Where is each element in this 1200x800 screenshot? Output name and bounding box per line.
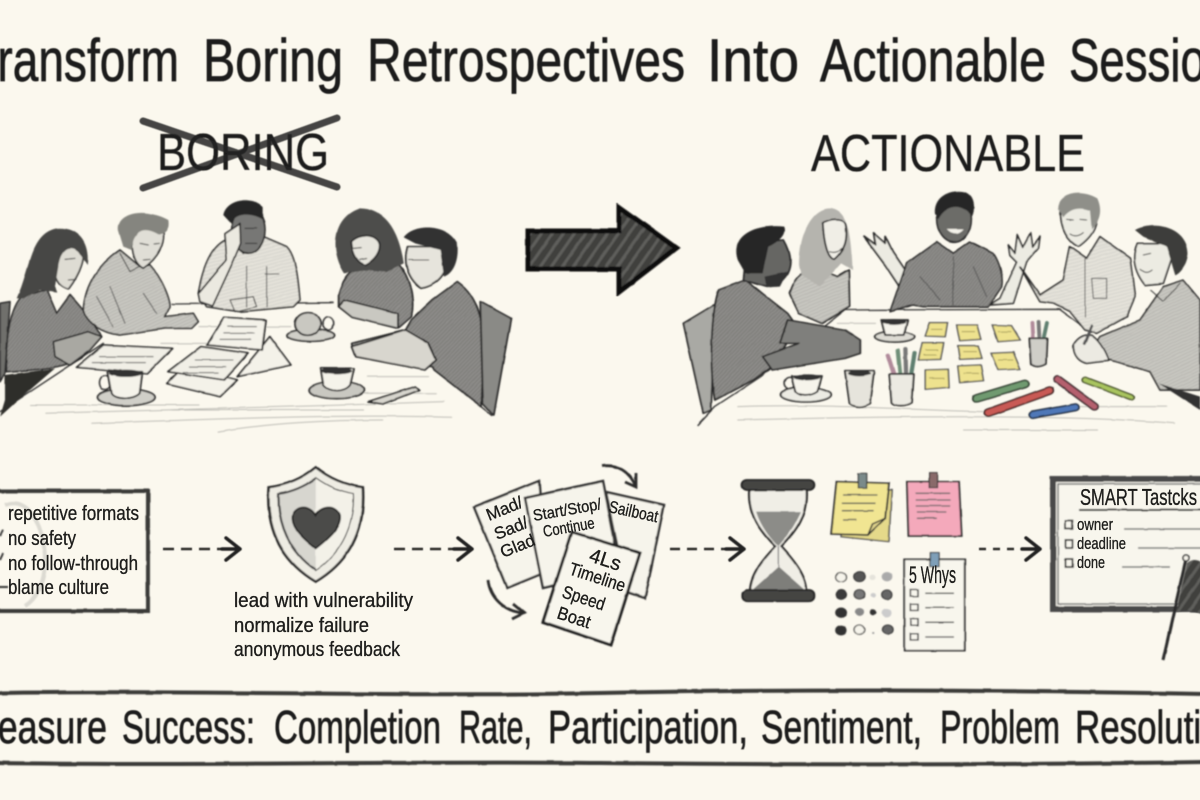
- pen cup large: [888, 349, 915, 406]
- markers: [977, 379, 1131, 415]
- arrow: dashed 4: [979, 538, 1040, 560]
- banner: measure success: Problem: [940, 701, 1060, 753]
- cards: retro formats: Mad/: [483, 493, 526, 525]
- note: yellow: [831, 473, 892, 542]
- cards: retro formats: Speed: [560, 582, 608, 614]
- person: woman with long blonde hair: [789, 208, 853, 323]
- banner: measure success: [0, 690, 1200, 764]
- person: man with curly hair: [711, 226, 860, 400]
- arrow: dashed 2: [394, 538, 472, 560]
- panel: smart tasks board: done: [1077, 553, 1105, 572]
- cards: retro formats: Timeline: [567, 559, 628, 596]
- person: woman with curly hair: [335, 208, 413, 328]
- icon: hourglass: [742, 480, 814, 601]
- person: man with glasses and t-shirt: [352, 227, 484, 407]
- panel: problems list: no follow-through: [8, 553, 138, 575]
- person: woman with crossed arms: [0, 228, 102, 417]
- dot vote grid: [836, 572, 893, 635]
- big arrow: [528, 207, 676, 292]
- text: psychological safety list: lead with vulnerability: [234, 590, 413, 612]
- banner: measure success: Success:: [122, 701, 255, 753]
- heading: actionable: ACTIONABLE: [811, 125, 1085, 183]
- panel: problems list: blame culture: [8, 577, 109, 599]
- person: man with dark hair gesturing, left arm: [864, 233, 912, 306]
- tall cup: [845, 370, 874, 407]
- banner: measure success: Rate,: [459, 701, 532, 753]
- note: pink: [907, 473, 962, 536]
- heading: boring crossed out: BORING: [157, 124, 329, 182]
- panel: problems list: repetitive formats: [8, 503, 139, 525]
- text: psychological safety list: normalize failure: [234, 615, 369, 637]
- coffee cup and saucer: [875, 319, 915, 342]
- cards: retro formats: Glad: [497, 531, 538, 562]
- person: man with dark hair gesturing: [890, 191, 1040, 312]
- coffee cup with saucer: [98, 370, 155, 406]
- people on the left: [0, 200, 300, 417]
- pen cup small: [1029, 322, 1047, 366]
- cards: retro formats: Boat: [555, 603, 593, 632]
- title: Actionable: [820, 27, 1046, 94]
- panel: smart tasks board: deadline: [1077, 534, 1126, 553]
- chair: [683, 303, 717, 413]
- cards: retro formats: [474, 466, 664, 645]
- title: Retrospectives: [367, 27, 685, 94]
- table streaks and edges: [698, 309, 1200, 430]
- chair left: [0, 302, 10, 382]
- table streaks and edges: [0, 303, 492, 432]
- papers on table: [77, 317, 291, 397]
- panel: problems list: no safety: [8, 528, 76, 550]
- icon: shield with heart: [268, 467, 363, 582]
- arrow: dashed 3: [670, 538, 744, 560]
- panel: smart tasks board: [1053, 479, 1200, 609]
- panel: problems list: [0, 491, 148, 611]
- icon: flag: [1163, 555, 1200, 660]
- coffee cup with saucer, right: [309, 368, 364, 399]
- illustration: bored team at table: [0, 200, 511, 432]
- text: psychological safety list: anonymous feedback: [234, 639, 401, 661]
- cards: retro formats: Start/Stop/: [532, 496, 603, 525]
- person: man with hand on forehead: [198, 200, 300, 312]
- banner: measure success: Completion: [274, 701, 441, 753]
- coffee cup tipped over: [287, 313, 334, 341]
- pen: [368, 387, 419, 404]
- person: man looking down: [83, 213, 198, 335]
- title: Boring: [203, 27, 343, 94]
- label: 5 whys: 5 Whys: [909, 562, 956, 589]
- coffee cup and saucer, front: [781, 374, 831, 402]
- person: man in profile: [1073, 226, 1200, 390]
- cards: retro formats: Continue: [542, 515, 596, 541]
- illustration: engaged team at table: [683, 191, 1200, 430]
- text: psychological safety list: [234, 590, 413, 661]
- cards: retro formats: 4Ls: [586, 545, 624, 576]
- title: Into: [707, 27, 799, 94]
- panel: smart tasks board: owner: [1077, 515, 1113, 534]
- banner: measure success: Sentiment,: [761, 701, 922, 753]
- cards: retro formats: Sad/: [491, 513, 531, 544]
- title: [0, 27, 1200, 94]
- heading: boring crossed out: [143, 118, 337, 188]
- arrow: dashed 1: [163, 538, 240, 560]
- person: man in light shirt: [1020, 193, 1135, 333]
- banner: measure success: Participation,: [548, 701, 748, 753]
- sticky notes grid: [918, 323, 1020, 389]
- cards: retro formats: Sailboat: [607, 497, 660, 526]
- chair right: [480, 302, 511, 415]
- sticky notes pinned: [831, 473, 965, 651]
- note: checklist paper: [904, 553, 965, 651]
